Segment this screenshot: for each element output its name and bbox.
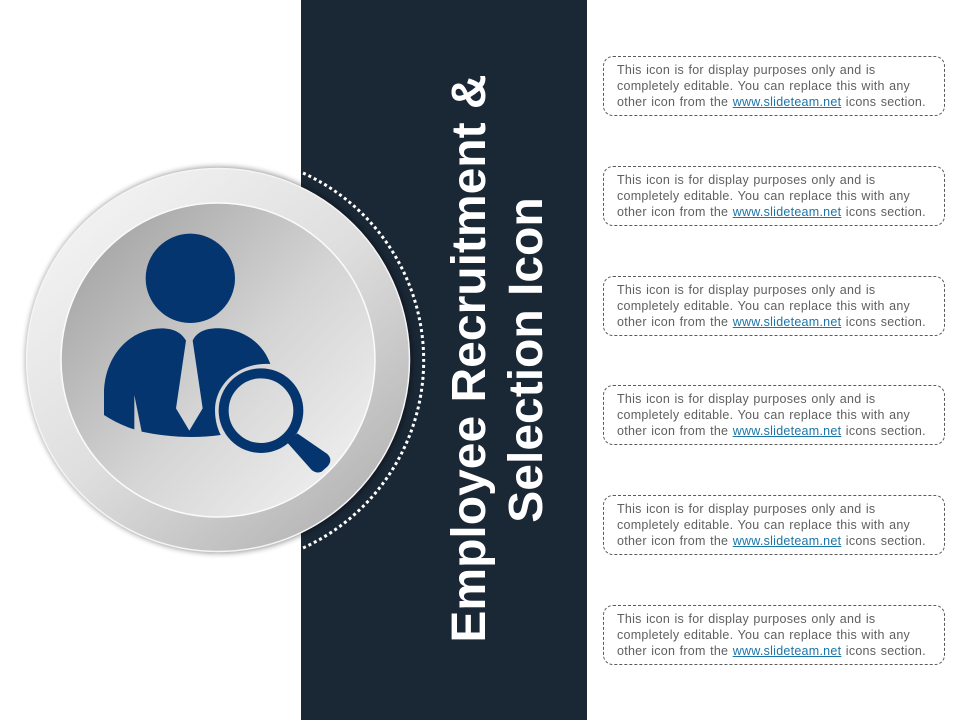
text box 5: other icon from the www.slideteam.net icons section. <box>617 534 926 548</box>
panel: dark central band <box>301 0 587 720</box>
text box 1 <box>603 56 945 116</box>
text box 5: completely editable. You can replace this with any <box>617 518 910 532</box>
text box 6 <box>603 605 945 665</box>
text box 2 <box>603 166 945 226</box>
icon: torso with tie <box>104 328 270 437</box>
outer ring <box>26 168 410 552</box>
text box 4: completely editable. You can replace this with any <box>617 408 910 422</box>
title <box>443 74 553 643</box>
text box 4: other icon from the www.slideteam.net icons section. <box>617 424 926 438</box>
icon: magnifier ring <box>224 373 298 448</box>
title line 1: Employee Recruitment & <box>443 74 496 643</box>
text box 3 <box>603 276 945 336</box>
inner disc <box>61 203 375 517</box>
text box 5: This icon is for display purposes only and is <box>617 502 875 516</box>
text box 5 <box>603 495 945 555</box>
title line 2: Selection Icon <box>500 197 553 523</box>
text box 2: This icon is for display purposes only and is <box>617 173 875 187</box>
icon: head <box>146 234 235 323</box>
text box 3: completely editable. You can replace this with any <box>617 299 910 313</box>
text box 4 <box>603 385 945 445</box>
text box 4: This icon is for display purposes only and is <box>617 392 875 406</box>
text box 1: other icon from the www.slideteam.net icons section. <box>617 95 926 109</box>
text box 3: This icon is for display purposes only and is <box>617 283 875 297</box>
text box 6: completely editable. You can replace this with any <box>617 628 910 642</box>
text box 3: other icon from the www.slideteam.net icons section. <box>617 315 926 329</box>
dotted arc <box>303 173 424 548</box>
text box 6: This icon is for display purposes only and is <box>617 612 875 626</box>
icon: employee with magnifying glass <box>104 234 330 473</box>
text box 1: completely editable. You can replace this with any <box>617 79 910 93</box>
text box 1: This icon is for display purposes only and is <box>617 63 875 77</box>
text box 2: completely editable. You can replace this with any <box>617 189 910 203</box>
badge shadow <box>26 167 412 553</box>
icon: magnifier handle <box>287 433 330 473</box>
text box 6: other icon from the www.slideteam.net icons section. <box>617 644 926 658</box>
text box 2: other icon from the www.slideteam.net icons section. <box>617 205 926 219</box>
